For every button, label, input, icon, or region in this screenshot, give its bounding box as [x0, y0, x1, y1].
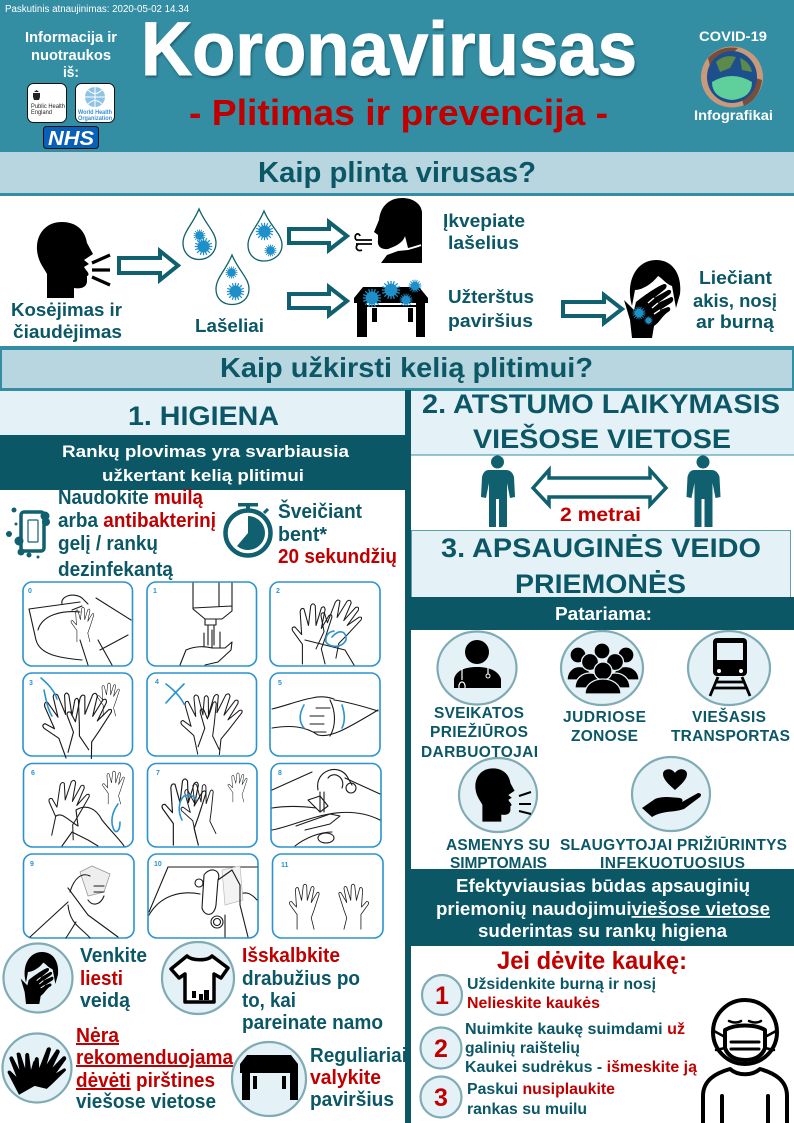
source text: nuotraukos — [31, 47, 111, 64]
label: carers of infected: SLAUGYTOJAI PRIŽIŪRINTYS — [560, 836, 787, 854]
header background — [0, 0, 794, 196]
step 1 text: Užsidenkite burną ir nosį — [467, 976, 656, 993]
panel: hygiene heading — [0, 391, 405, 435]
icon: double arrow — [533, 470, 666, 505]
label: busy areas: JUDRIOSE — [563, 709, 646, 726]
icon: t-shirt — [162, 942, 234, 1014]
banner: most effective use: priemonių naudojimui viešose vietose — [436, 899, 770, 919]
step 2 number: 2 — [434, 1035, 448, 1063]
step 1 number — [422, 975, 462, 1015]
label: carers of infected: INFEKUOTUOSIUS — [600, 855, 745, 872]
label: touching eyes, nose or mouth: ar burną — [696, 312, 775, 332]
covid label: COVID-19 — [699, 28, 767, 44]
panel: face protection heading: PRIEMONĖS — [515, 569, 686, 599]
icon: person wearing mask — [703, 1000, 787, 1123]
step 1 text: Nelieskite kaukės — [467, 995, 600, 1012]
icon: doctor — [438, 632, 516, 704]
text: clean surfaces regularly — [310, 1045, 407, 1111]
panel: wash step 11: 11 — [281, 862, 289, 869]
text: clean surfaces regularly: valykite — [310, 1067, 381, 1089]
text: avoid touching face: Venkite — [80, 945, 147, 967]
banner: recommended: Patariama: — [555, 604, 652, 624]
icon: person left — [481, 456, 515, 527]
label: touching eyes, nose or mouth: Liečiant — [699, 268, 772, 288]
icon: droplets — [183, 209, 282, 304]
label: busy areas — [563, 709, 646, 745]
label: droplets: Lašeliai — [195, 316, 264, 336]
text: wash clothes: Išskalbkite — [242, 945, 340, 967]
arrow: droplets to surface — [289, 287, 347, 315]
panel: wash step 5 — [270, 673, 380, 756]
icon: person with symptoms — [459, 758, 537, 832]
panel: wash step 6: 6 — [31, 770, 35, 777]
logo: NHS: NHS — [48, 128, 95, 150]
text: use soap or gel: Naudokite muilą — [58, 487, 204, 509]
banner: hand washing most important: užkertant kelią plitimui — [102, 466, 304, 485]
step 2 text: Nuimkite kaukę suimdami už — [465, 1021, 685, 1038]
text: gloves not recommended: rekomenduojama — [76, 1047, 234, 1069]
text: use soap or gel: gelį / rankų — [58, 533, 158, 555]
step 3 text: Paskui nusiplaukite — [467, 1081, 615, 1098]
text: scrub for 20 seconds: Šveičiant — [278, 499, 362, 523]
last update timestamp: Paskutinis atnaujinimas: 2020-05-02 14.34 — [5, 4, 189, 15]
heading band: how the virus spreads — [0, 152, 794, 193]
label: contaminated surface — [448, 287, 534, 331]
panel: distancing heading: 2. ATSTUMO LAIKYMASIS — [422, 389, 780, 419]
step 1 number: 1 — [435, 982, 449, 1010]
logo: Public Health England: Public Health — [31, 104, 65, 110]
label: contaminated surface: paviršius — [448, 311, 533, 331]
label: healthcare workers: DARBUOTOJAI — [421, 744, 538, 761]
logo: Public Health England: England — [31, 110, 52, 116]
panel: wash step 7: 7 — [156, 770, 160, 777]
label: 2 metres: 2 metrai — [560, 505, 641, 526]
banner: most effective use: Efektyviausias būdas apsauginių — [456, 876, 750, 896]
panel: wash step 0 — [23, 582, 132, 666]
label: healthcare workers — [421, 705, 538, 761]
text: wash clothes: to, kai — [242, 990, 296, 1012]
step 3 text: rankas su muilu — [467, 1101, 587, 1118]
title: Koronavirusas — [141, 7, 637, 92]
label: people with symptoms: ASMENYS SU — [446, 837, 550, 854]
label: public transport: VIEŠASIS — [692, 708, 766, 726]
panel: wash step 6 — [24, 764, 133, 847]
label: people with symptoms: SIMPTOMAIS — [450, 855, 547, 872]
panel: wash step 2 — [270, 582, 380, 666]
label: coughing and sneezing: Kosėjimas ir — [11, 300, 122, 320]
logo: World Health Organization: Organization — [78, 116, 112, 122]
source text: iš: — [63, 64, 79, 81]
heading band: how to prevent spread: Kaip užkirsti kelią plitimui? — [220, 352, 593, 383]
panel: wash step 7 — [148, 764, 257, 847]
label: carers of infected — [560, 836, 787, 872]
icon: gloves — [2, 1034, 73, 1102]
step 3 number: 3 — [434, 1084, 448, 1112]
panel: distancing heading — [411, 389, 794, 456]
step 2 text: galinių raištelių — [465, 1040, 580, 1057]
label: touching eyes, nose or mouth: akis, nosį — [693, 291, 777, 311]
icon: table to clean — [232, 1042, 306, 1116]
panel: wash step 1: 1 — [153, 588, 157, 595]
panel: wash step 10: 10 — [154, 861, 162, 868]
text: wash clothes: pareinate namo — [242, 1012, 383, 1034]
label: public transport — [671, 708, 790, 745]
text: gloves not recommended: viešose vietose — [76, 1091, 216, 1113]
text: wash clothes — [242, 945, 383, 1034]
banner: recommended — [411, 597, 794, 630]
icon: stopwatch — [226, 503, 270, 556]
label: contaminated surface: Užterštus — [448, 287, 534, 307]
panel: wash step 4 — [147, 673, 256, 757]
icon: do not touch face — [4, 944, 72, 1012]
label: coughing and sneezing: čiaudėjimas — [13, 322, 122, 342]
logo: Public Health England — [28, 84, 66, 122]
icon: inhaling head — [355, 198, 422, 263]
label: public transport: TRANSPORTAS — [671, 728, 790, 745]
panel: wash step 11 — [272, 854, 383, 938]
panel: wash step 0: 0 — [28, 588, 32, 595]
source text — [25, 29, 117, 81]
icon: train — [688, 631, 770, 705]
text: scrub for 20 seconds — [278, 499, 397, 568]
panel: hygiene heading: 1. HIGIENA — [128, 401, 279, 431]
label: inhale droplets — [443, 211, 525, 253]
step 2 number — [420, 1028, 462, 1068]
logo: World Health Organization: World Health — [78, 110, 112, 116]
panel: wash step 9 — [24, 854, 134, 938]
label: healthcare workers: SVEIKATOS — [434, 705, 524, 722]
icon: coughing head — [37, 222, 110, 298]
banner: most effective use: suderintas su rankų higiena — [478, 921, 728, 941]
icon: heart on hand — [632, 757, 710, 831]
panel: wash step 10 — [148, 854, 258, 938]
logo: World Health Organization — [76, 84, 114, 122]
label: coughing and sneezing — [11, 300, 122, 342]
step 3 number — [420, 1076, 462, 1118]
step 1 text — [467, 976, 656, 1012]
arrow: surface to face — [563, 295, 622, 323]
label: inhale droplets: Įkvepiate — [443, 211, 525, 231]
banner: most effective use — [411, 869, 794, 946]
panel: wash step 9: 9 — [30, 861, 34, 868]
label: busy areas: ZONOSE — [571, 728, 638, 745]
panel: wash step 4: 4 — [155, 679, 159, 686]
text: clean surfaces regularly: paviršius — [310, 1089, 394, 1111]
icon: crowd — [561, 631, 643, 705]
panel: face protection heading: 3. APSAUGINĖS VEIDO — [441, 533, 761, 563]
icon: contaminated table — [354, 280, 428, 337]
text: scrub for 20 seconds: bent* — [278, 524, 327, 546]
text: gloves not recommended: dėvėti pirštines — [76, 1070, 215, 1092]
infografikai label: Infografikai — [694, 107, 773, 123]
banner: hand washing most important: Rankų plovimas yra svarbiausia — [62, 442, 350, 461]
panel: wash step 8: 8 — [278, 770, 282, 777]
panel: distancing heading: VIEŠOSE VIETOSE — [473, 423, 731, 454]
text: clean surfaces regularly: Reguliariai — [310, 1045, 407, 1067]
panel: wash step 5: 5 — [278, 680, 282, 687]
text: avoid touching face — [80, 945, 147, 1012]
text: use soap or gel: arba antibakterinį — [58, 510, 216, 532]
subtitle: - Plitimas ir prevencija - — [189, 92, 608, 133]
text: use soap or gel — [58, 487, 216, 581]
text: scrub for 20 seconds: 20 sekundžių — [278, 546, 397, 568]
label: healthcare workers: PRIEŽIŪROS — [430, 723, 528, 741]
label: touching eyes, nose or mouth — [693, 268, 777, 332]
text: gloves not recommended: Nėra — [76, 1025, 120, 1047]
icon: globe with mask — [701, 46, 763, 108]
panel: wash step 1 — [147, 582, 256, 666]
label: inhale droplets: lašelius — [448, 233, 519, 253]
label: people with symptoms — [446, 837, 550, 872]
heading: if you wear a mask: Jei dėvite kaukę: — [497, 947, 687, 975]
text: avoid touching face: liesti — [80, 968, 123, 990]
text: gloves not recommended — [76, 1025, 234, 1113]
panel: wash step 3 — [23, 673, 132, 762]
icon: person right — [686, 456, 720, 527]
heading band: how to prevent spread — [0, 346, 794, 391]
heading band: how the virus spreads: Kaip plinta virusas? — [258, 157, 536, 189]
panel: face protection heading — [412, 530, 790, 599]
panel: wash step 2: 2 — [276, 588, 280, 595]
arrow: droplets to inhaling — [289, 222, 347, 250]
text: wash clothes: drabužius po — [242, 968, 360, 990]
icon: soap bottle — [6, 508, 50, 558]
arrow: cough to droplets — [119, 251, 178, 280]
text: use soap or gel: dezinfekantą — [58, 559, 174, 581]
step 3 text — [467, 1081, 615, 1118]
panel: wash step 3: 3 — [29, 680, 33, 687]
icon: hand touching face — [624, 260, 680, 338]
source text: Informacija ir — [25, 29, 117, 46]
step 2 text — [465, 1021, 697, 1076]
centre divider — [405, 390, 411, 1123]
step 2 text: Kaukei sudrėkus - išmeskite ją — [465, 1059, 697, 1076]
banner: hand washing most important — [0, 435, 405, 490]
panel: wash step 8 — [271, 764, 381, 847]
text: avoid touching face: veidą — [80, 990, 131, 1012]
